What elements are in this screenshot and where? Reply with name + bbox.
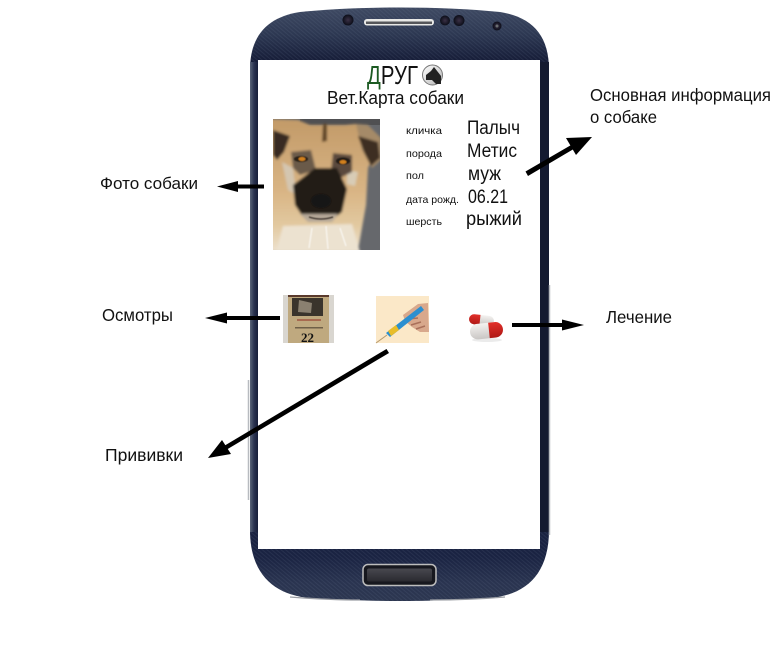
icon: pills [469, 314, 504, 342]
phone front cameras and sensors [342, 14, 502, 30]
label: main info about the dog [590, 85, 771, 127]
field values: муж [468, 164, 501, 185]
field labels: пол [406, 170, 424, 182]
label: treatment: Лечение [606, 307, 672, 327]
arrow: to treatment label [512, 320, 584, 330]
field values: Палыч [467, 118, 520, 139]
app subtitle: Вет.Карта собаки [327, 87, 464, 108]
arrow: to examinations label [205, 312, 280, 324]
field values: 06.21 [468, 187, 508, 208]
infographic canvas [101, 8, 770, 601]
arrow: to photo label [217, 181, 264, 192]
label: main info about the dog: Основная информация [590, 85, 771, 105]
icon: tear-off calendar [283, 295, 334, 345]
field values: Метис [467, 141, 517, 162]
label: vaccinations: Прививки [105, 445, 183, 465]
dog details table [406, 118, 522, 230]
arrow: to main info label [526, 137, 592, 176]
phone body [248, 8, 550, 601]
field labels: порода [406, 148, 442, 160]
label: dog photo: Фото собаки [100, 174, 198, 193]
phone screen [258, 60, 540, 549]
icon: dog head logo [422, 65, 442, 85]
field labels: дата рожд. [406, 194, 459, 206]
phone speaker [364, 19, 434, 26]
icon: tear-off calendar: 22 [301, 330, 314, 345]
field labels: шерсть [406, 216, 443, 228]
label: examinations: Осмотры [102, 305, 173, 325]
field values: рыжий [466, 209, 522, 230]
label: main info about the dog: о собаке [590, 107, 657, 127]
arrow: to vaccinations label [208, 349, 389, 458]
dog photo [270, 119, 381, 252]
icon: syringe [376, 296, 429, 343]
field labels: кличка [406, 125, 442, 137]
field values [466, 118, 522, 230]
phone home button [363, 564, 436, 586]
app title: ДРУГ [367, 60, 418, 90]
field labels [406, 125, 459, 228]
